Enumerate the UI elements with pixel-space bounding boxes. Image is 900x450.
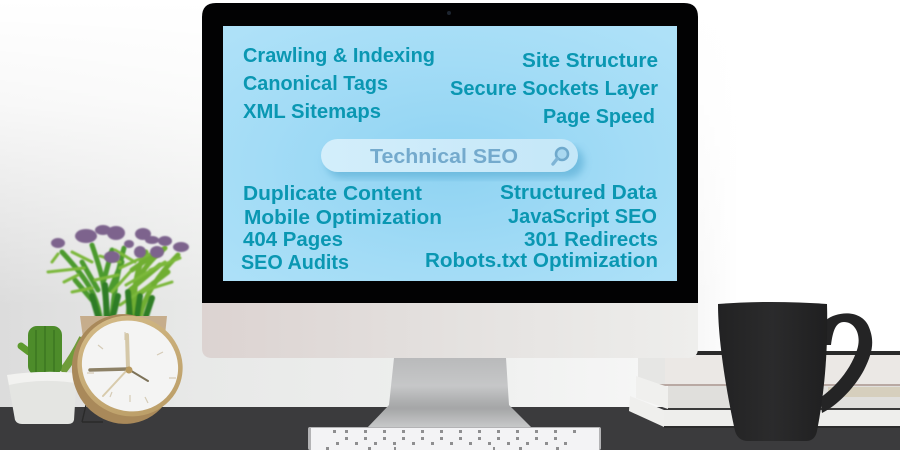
white pot bbox=[7, 372, 77, 424]
mug handle bbox=[820, 313, 872, 413]
clock back casing bbox=[63, 306, 185, 432]
topic list: bottom left: Duplicate Content bbox=[243, 183, 422, 205]
search bar label: Technical SEO bbox=[370, 145, 518, 168]
computer monitor bbox=[202, 3, 698, 428]
topic list: bottom left bbox=[241, 183, 442, 274]
flowers bbox=[51, 225, 189, 263]
keyboard bbox=[308, 427, 601, 450]
small cactus in white pot bbox=[7, 326, 83, 424]
mug body bbox=[718, 302, 827, 441]
potted plant bbox=[48, 225, 189, 345]
topic list: top right: Secure Sockets Layer bbox=[450, 78, 658, 100]
topic list: top right: Page Speed bbox=[543, 106, 655, 128]
icon: magnifying glass bbox=[553, 148, 568, 164]
monitor bezel bbox=[202, 3, 698, 303]
topic list: bottom right: Structured Data bbox=[500, 182, 658, 204]
topic list: top left: Canonical Tags bbox=[243, 73, 388, 95]
topic list: bottom right: Robots.txt Optimization bbox=[425, 250, 658, 272]
monitor stand bbox=[367, 358, 532, 428]
screen bbox=[223, 26, 677, 281]
coffee mug bbox=[718, 302, 872, 441]
webcam bbox=[447, 11, 451, 15]
cactus bbox=[21, 326, 83, 375]
clock hands bbox=[90, 335, 148, 396]
clock rim bbox=[63, 301, 197, 431]
topic list: bottom left: Mobile Optimization bbox=[244, 207, 442, 229]
topic list: bottom left: SEO Audits bbox=[241, 252, 349, 274]
search bar bbox=[321, 139, 584, 178]
topic list: bottom right: JavaScript SEO bbox=[508, 206, 657, 228]
desk surface bbox=[0, 407, 900, 450]
stack of books bbox=[629, 351, 900, 428]
plant stems and leaves bbox=[48, 245, 180, 316]
topic list: bottom right: 301 Redirects bbox=[524, 229, 658, 251]
desk clock bbox=[63, 301, 197, 432]
topic list: top left: Crawling & Indexing bbox=[243, 45, 435, 67]
monitor chin bbox=[202, 300, 698, 358]
topic list: top right bbox=[450, 50, 658, 128]
clock stand bbox=[82, 405, 103, 422]
clock tick marks bbox=[87, 332, 176, 403]
flower pot bbox=[80, 316, 167, 345]
topic list: bottom left: 404 Pages bbox=[243, 229, 343, 251]
topic list: top left bbox=[243, 45, 435, 123]
topic list: top left: XML Sitemaps bbox=[243, 101, 381, 123]
topic list: top right: Site Structure bbox=[522, 50, 658, 72]
clock face bbox=[69, 307, 191, 425]
topic list: bottom right bbox=[425, 182, 658, 272]
